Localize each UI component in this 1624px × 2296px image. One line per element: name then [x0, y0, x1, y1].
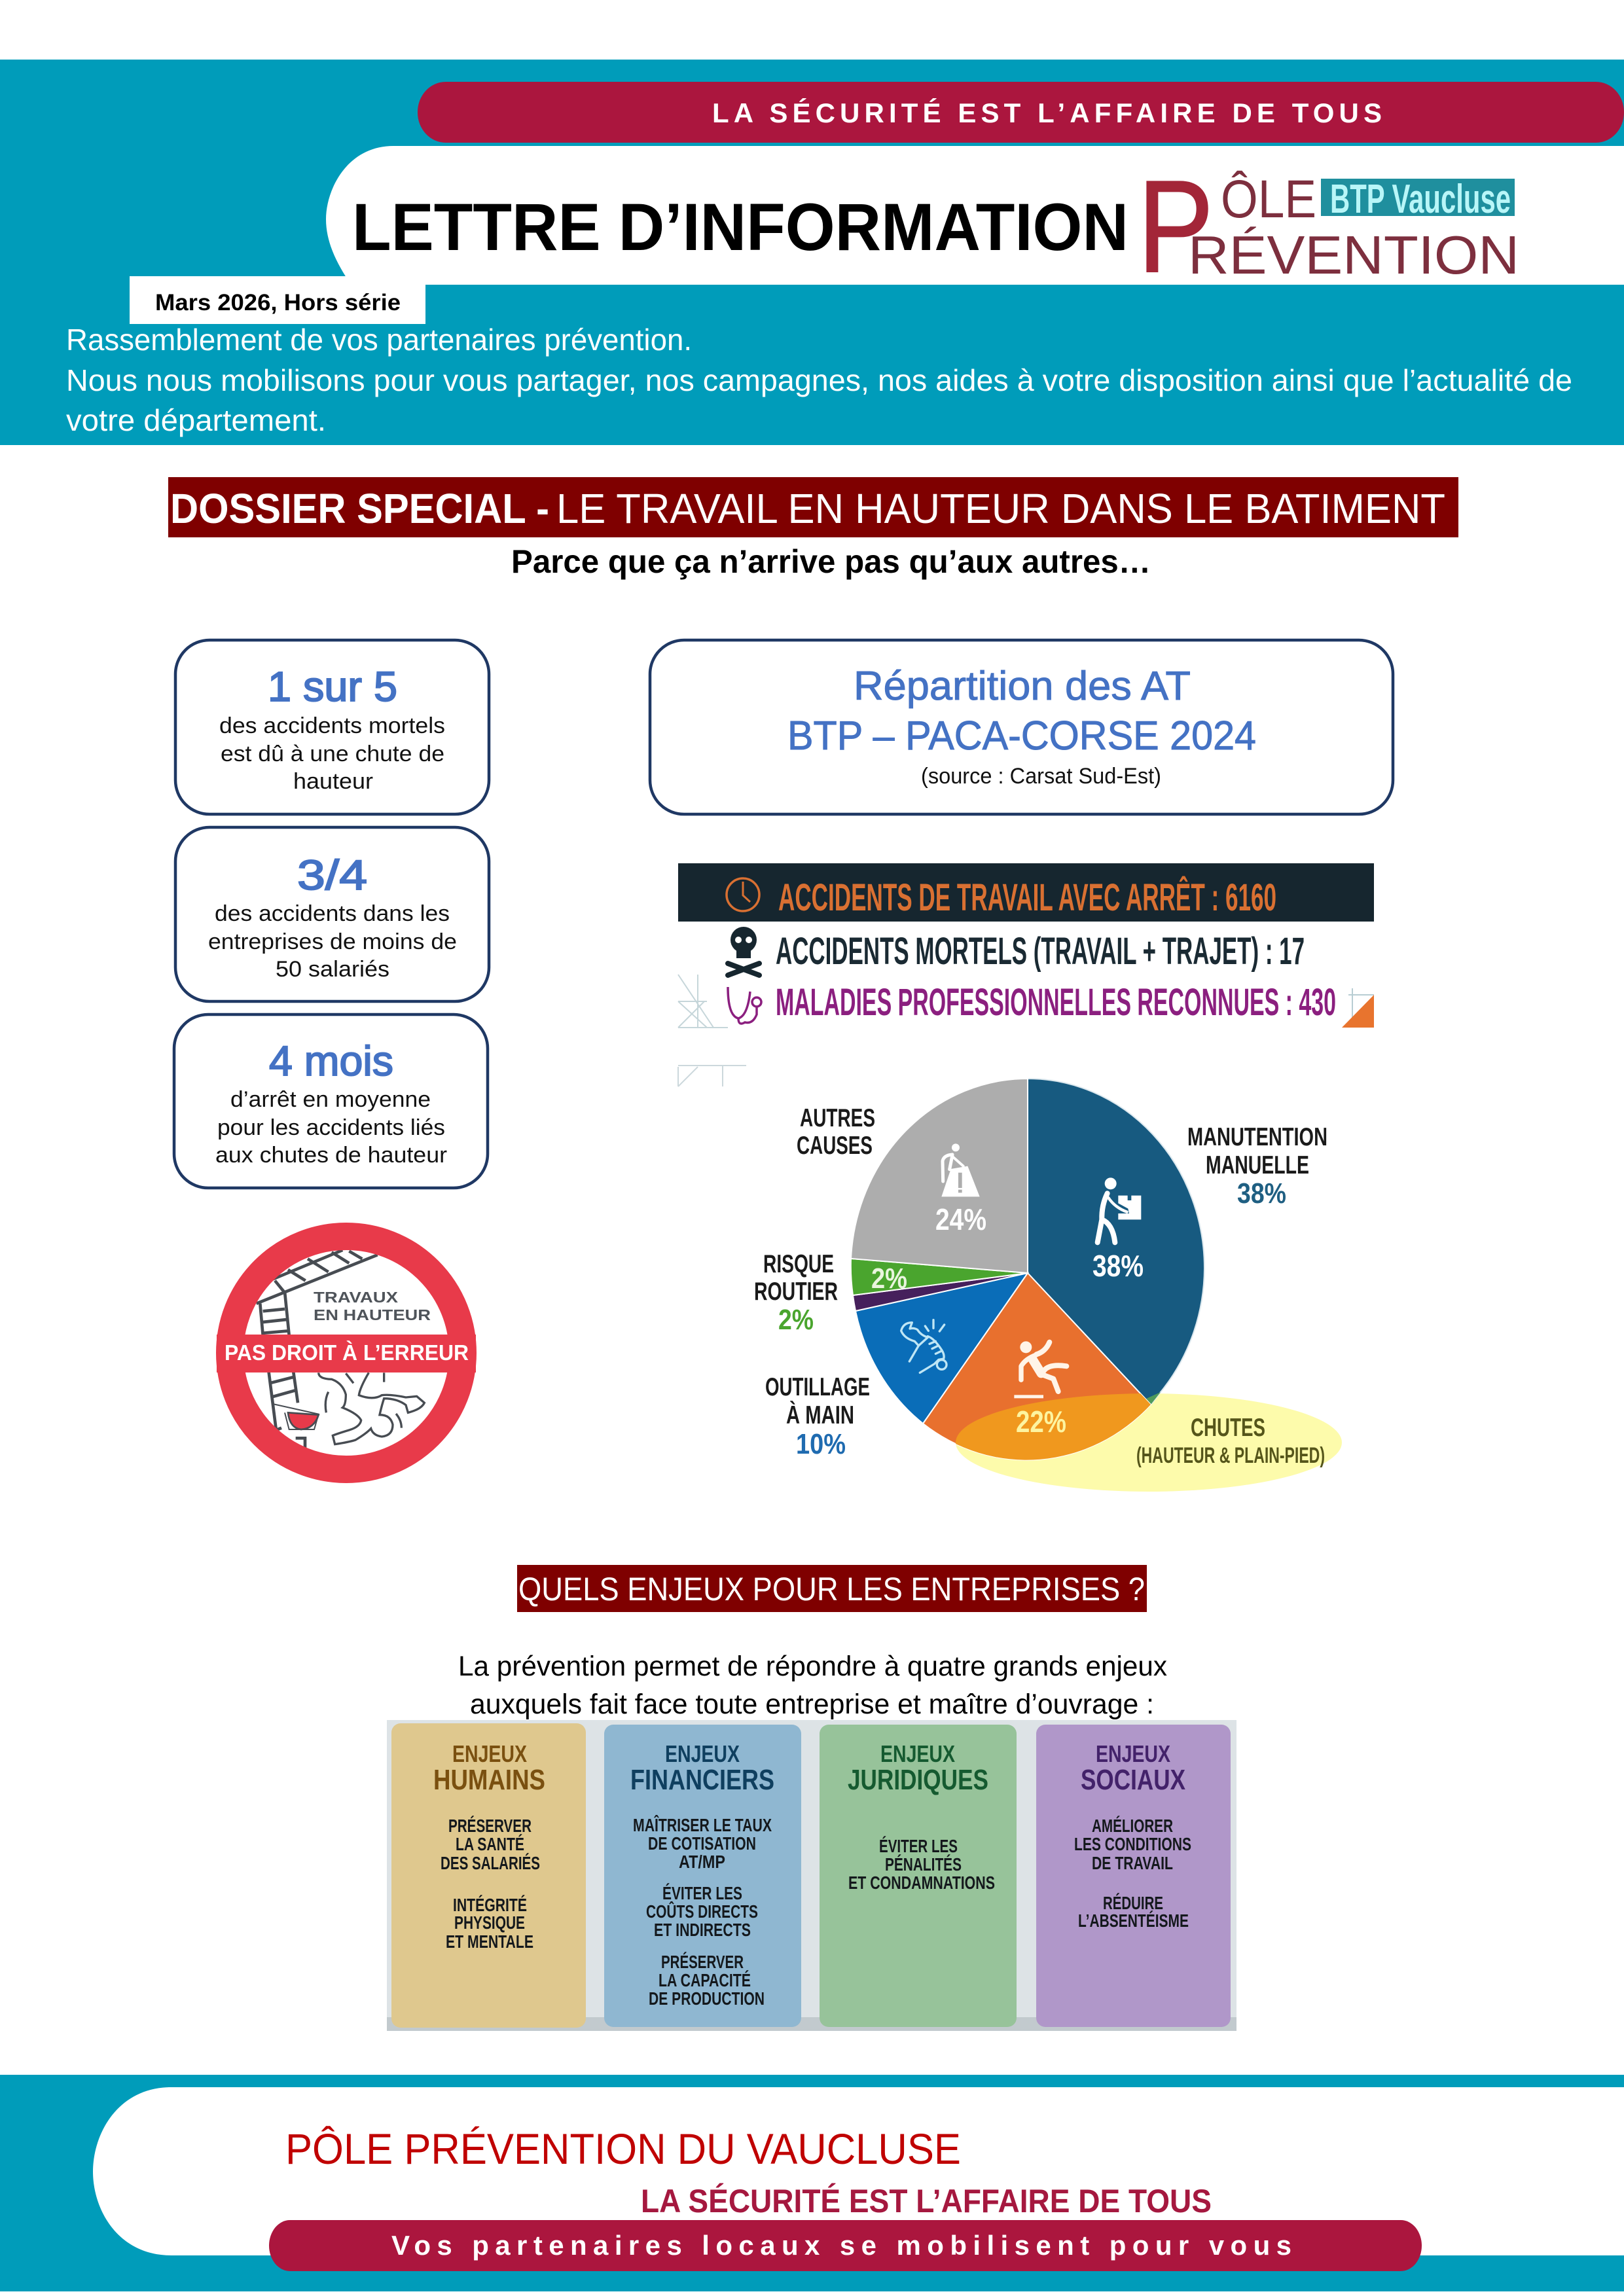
slice: manutention 38%	[1028, 1079, 1204, 1405]
occupational diseases	[728, 981, 1336, 1024]
column: financiers: ENJEUX	[665, 1740, 740, 1767]
column: juridiques: ENJEUX	[880, 1740, 955, 1767]
icon: falling worker	[1014, 1341, 1066, 1398]
stat card: 1 sur 5: 1 sur 5	[268, 663, 397, 710]
column: humains: ENJEUX	[452, 1740, 527, 1767]
column: financiers: ET INDIRECTS	[654, 1920, 751, 1940]
footer pill	[269, 2220, 1422, 2271]
column: financiers: ÉVITER LES	[662, 1883, 742, 1903]
column: financiers: DE PRODUCTION	[649, 1988, 765, 2009]
column: humains: DES SALARIÉS	[441, 1853, 540, 1873]
pie chart: accident causes	[754, 1079, 1342, 1492]
subheading: Parce que ça n’arrive pas qu’aux autres…	[511, 543, 1151, 580]
label: manutention manuelle: MANUELLE	[1206, 1151, 1309, 1179]
key figures strip	[678, 863, 1374, 1086]
column: juridiques: ET CONDAMNATIONS	[848, 1873, 995, 1893]
enjeux intro text	[458, 1651, 1167, 1720]
column: financiers: FINANCIERS	[630, 1764, 774, 1796]
slice: chutes 22%: 22%	[1016, 1405, 1066, 1439]
footer pill: Vos partenaires locaux se mobilisent pour vous	[391, 2230, 1291, 2261]
card: répartition des AT: BTP – PACA-CORSE 2024	[787, 713, 1256, 759]
label: risque routier: RISQUE	[763, 1250, 834, 1278]
label: autres causes: CAUSES	[797, 1132, 873, 1160]
card: répartition des AT: (source : Carsat Sud-Est)	[921, 764, 1161, 789]
slice: outillage 10%	[856, 1273, 1028, 1424]
logo: Pôle Prévention BTP Vaucluse: BTP Vaucluse	[1330, 177, 1511, 222]
column: financiers: AT/MP	[679, 1852, 725, 1872]
stat card: 1 sur 5: hauteur	[293, 769, 373, 794]
badge: travaux en hauteur: EN HAUTEUR	[314, 1306, 431, 1323]
header slogan pill	[418, 82, 1624, 143]
dossier heading: LE TRAVAIL EN HAUTEUR DANS LE BATIMENT	[556, 485, 1445, 532]
logo: Pôle Prévention BTP Vaucluse	[1138, 154, 1519, 300]
section heading: enjeux: QUELS ENJEUX POUR LES ENTREPRISES ?	[518, 1571, 1145, 1607]
slice: other 1%	[853, 1273, 1028, 1311]
intro text: Nous nous mobilisons pour vous partager, nos campagnes, nos aides à votre disposition ainsi que l’actualité de	[66, 363, 1572, 397]
column: humains: HUMAINS	[433, 1764, 545, 1796]
column: sociaux	[1036, 1725, 1231, 2027]
stat card: 3/4	[175, 827, 489, 1001]
column: financiers: LA CAPACITÉ	[659, 1970, 751, 1990]
column: juridiques: JURIDIQUES	[848, 1764, 988, 1796]
footer slogan: LA SÉCURITÉ EST L’AFFAIRE DE TOUS	[641, 2183, 1212, 2219]
column: juridiques	[820, 1725, 1017, 2027]
dossier heading: DOSSIER SPECIAL -	[170, 485, 549, 532]
label: autres causes: AUTRES	[800, 1104, 875, 1132]
label: autres causes	[797, 1104, 875, 1160]
accidents with stoppage: ACCIDENTS DE TRAVAIL AVEC ARRÊT : 6160	[778, 876, 1276, 919]
date tab: Mars 2026, Hors série	[155, 290, 401, 315]
intro text: Rassemblement de vos partenaires prévention.	[66, 323, 692, 357]
label: risque routier: 2%	[778, 1304, 814, 1336]
enjeux panel	[387, 1720, 1236, 2031]
column: humains: PRÉSERVER	[448, 1816, 532, 1836]
column: financiers: MAÎTRISER LE TAUX	[633, 1815, 772, 1835]
slice: autres causes 24%	[851, 1079, 1028, 1273]
column: sociaux: AMÉLIORER	[1092, 1816, 1173, 1836]
column: sociaux: L’ABSENTÉISME	[1078, 1910, 1189, 1931]
column: sociaux: DE TRAVAIL	[1092, 1853, 1173, 1873]
header slogan pill: LA SÉCURITÉ EST L’AFFAIRE DE TOUS	[712, 98, 1382, 128]
icon: hand with wrench	[901, 1320, 947, 1372]
slice: autres causes 24%: 24%	[935, 1202, 986, 1236]
logo: Pôle Prévention BTP Vaucluse: ÔLE	[1221, 170, 1316, 229]
intro text: votre département.	[66, 403, 326, 437]
label: outillage à main	[765, 1373, 870, 1460]
card: répartition des AT	[650, 640, 1393, 814]
enjeux intro text: auxquels fait face toute entreprise et maître d’ouvrage :	[470, 1689, 1154, 1720]
label: outillage à main: 10%	[796, 1428, 846, 1460]
enjeux intro text: La prévention permet de répondre à quatre grands enjeux	[458, 1651, 1167, 1682]
date tab	[130, 276, 425, 324]
label: risque routier	[754, 1250, 838, 1336]
logo: Pôle Prévention BTP Vaucluse: RÉVENTION	[1188, 224, 1519, 285]
stat card: 3/4: des accidents dans les	[215, 901, 450, 926]
column: financiers: PRÉSERVER	[661, 1952, 744, 1972]
stat card: 1 sur 5: est dû à une chute de	[221, 742, 444, 766]
header banner	[0, 60, 1624, 445]
label: chutes	[1136, 1414, 1325, 1468]
label: risque routier: ROUTIER	[754, 1278, 838, 1306]
stat card: 3/4: 50 salariés	[276, 957, 389, 982]
label: chutes: (HAUTEUR & PLAIN-PIED)	[1136, 1443, 1325, 1468]
stat card: 4 mois: 4 mois	[269, 1037, 393, 1085]
icon: worker with warning sign	[941, 1143, 980, 1196]
stat card: 4 mois: pour les accidents liés	[217, 1115, 445, 1140]
slice: risque routier 2%: 2%	[871, 1263, 907, 1295]
column: financiers	[604, 1725, 801, 2027]
stat card: 4 mois	[174, 1014, 488, 1188]
dossier heading	[168, 477, 1458, 537]
footer organisation name: PÔLE PRÉVENTION DU VAUCLUSE	[285, 2125, 961, 2173]
card: répartition des AT: Répartition des AT	[854, 664, 1191, 709]
logo: Pôle Prévention BTP Vaucluse: P	[1138, 154, 1214, 300]
column: humains	[391, 1723, 586, 2028]
label: outillage à main: OUTILLAGE	[765, 1373, 870, 1401]
label: chutes: CHUTES	[1191, 1414, 1265, 1442]
stat card: 1 sur 5	[175, 640, 489, 814]
label: manutention manuelle	[1187, 1123, 1327, 1210]
stat card: 4 mois: d’arrêt en moyenne	[230, 1087, 431, 1112]
footer banner	[0, 2075, 1624, 2291]
column: sociaux: SOCIAUX	[1081, 1764, 1185, 1796]
label: outillage à main: À MAIN	[786, 1401, 854, 1429]
badge: travaux en hauteur	[217, 1236, 476, 1469]
slice: manutention 38%: 38%	[1092, 1249, 1144, 1283]
intro text	[66, 323, 1572, 437]
icon: worker carrying box	[1098, 1177, 1141, 1242]
accidents with stoppage	[678, 863, 1374, 922]
column: sociaux: RÉDUIRE	[1103, 1893, 1163, 1913]
column: financiers: DE COTISATION	[648, 1833, 756, 1854]
label: manutention manuelle: 38%	[1237, 1177, 1286, 1210]
stat card: 1 sur 5: des accidents mortels	[219, 713, 445, 738]
label: manutention manuelle: MANUTENTION	[1187, 1123, 1327, 1151]
slice: risque routier 2%	[851, 1259, 1028, 1295]
slice: chutes 22%	[924, 1273, 1152, 1461]
fatal accidents	[728, 927, 1305, 975]
column: humains: PHYSIQUE	[454, 1912, 525, 1933]
column: juridiques: ÉVITER LES	[879, 1836, 958, 1856]
badge: travaux en hauteur: TRAVAUX	[314, 1289, 399, 1306]
column: humains: INTÉGRITÉ	[453, 1895, 527, 1915]
column: sociaux: LES CONDITIONS	[1074, 1834, 1191, 1854]
column: sociaux: ENJEUX	[1096, 1740, 1170, 1767]
column: juridiques: PÉNALITÉS	[885, 1854, 962, 1874]
column: humains: LA SANTÉ	[456, 1834, 524, 1854]
stat card: 3/4: 3/4	[297, 852, 367, 899]
stat card: 3/4: entreprises de moins de	[208, 929, 457, 954]
title: LETTRE D’INFORMATION	[352, 190, 1128, 264]
column: financiers: COÛTS DIRECTS	[646, 1901, 758, 1922]
stat card: 4 mois: aux chutes de hauteur	[215, 1143, 447, 1168]
column: humains: ET MENTALE	[446, 1931, 533, 1952]
badge: travaux en hauteur: PAS DROIT À L’ERREUR	[225, 1340, 469, 1365]
